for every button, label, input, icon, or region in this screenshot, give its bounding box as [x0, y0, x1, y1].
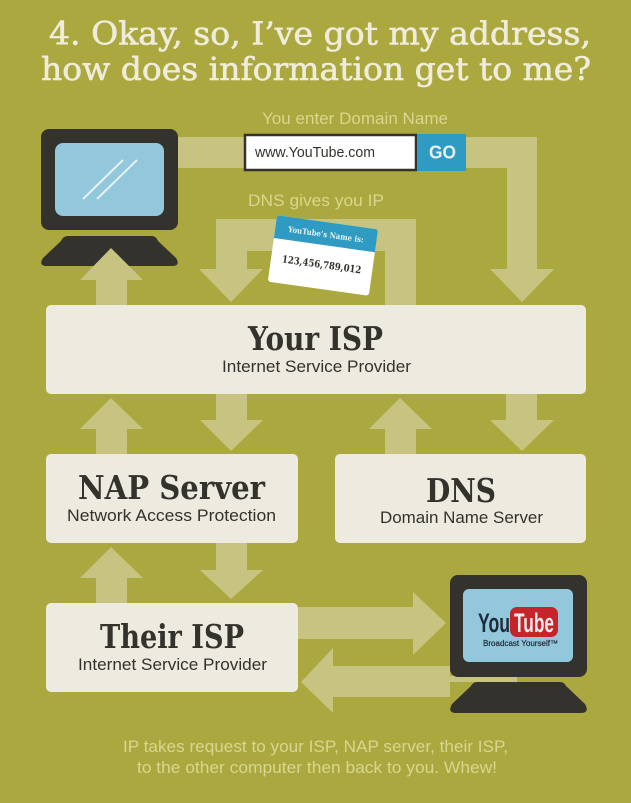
caption: summary	[123, 738, 508, 777]
search box	[245, 135, 416, 170]
panel: DNS: DNS	[426, 471, 496, 510]
arrow: NAP up to Your ISP	[80, 398, 143, 454]
arrow: other computer back to Their ISP	[301, 648, 517, 713]
arrow: DNS gives IP back	[199, 219, 416, 305]
arrow: Your ISP down to DNS	[490, 394, 554, 451]
computer: YouTube	[450, 575, 587, 713]
arrow: computer to search box	[178, 137, 246, 168]
GO button: GO	[429, 142, 456, 162]
arrow: Your ISP down to NAP	[200, 394, 263, 451]
caption: you enter domain name: You enter Domain Name	[262, 110, 448, 128]
panel: NAP Server	[46, 454, 298, 543]
caption: summary: IP takes request to your ISP, NAP server, their ISP,	[123, 738, 508, 756]
logo: YouTube: Broadcast Yourself™	[483, 639, 558, 648]
panel: NAP Server: Network Access Protection	[67, 507, 276, 525]
arrow: ISP up to computer	[80, 248, 143, 305]
arrow: Their ISP to other computer	[298, 592, 446, 655]
card: YouTube's name is: YouTube’s Name is:	[287, 224, 364, 244]
panel: DNS	[335, 454, 586, 543]
computer: user	[41, 129, 178, 266]
card: YouTube's name is: 123,456,789,012	[281, 254, 362, 276]
panel: Their ISP: Their ISP	[100, 617, 244, 656]
panel: Their ISP: Internet Service Provider	[78, 656, 268, 674]
arrow: GO to DNS	[466, 137, 554, 302]
panel: Their ISP	[46, 603, 298, 692]
title: 4. Okay, so, I’ve got my address,	[49, 14, 591, 52]
panel: Your ISP	[46, 305, 586, 394]
card: YouTube's name is	[268, 215, 378, 296]
panel: Your ISP: Your ISP	[247, 319, 383, 358]
logo: YouTube	[478, 607, 558, 648]
caption: summary: to the other computer then back to you. Whew!	[137, 759, 497, 777]
panel: DNS: Domain Name Server	[380, 509, 544, 527]
search box: www.YouTube.com	[254, 145, 375, 161]
caption: DNS gives you IP: DNS gives you IP	[248, 192, 384, 210]
logo: YouTube: You	[478, 608, 510, 638]
panel: Your ISP: Internet Service Provider	[222, 358, 412, 376]
title	[41, 14, 591, 88]
panel: NAP Server: NAP Server	[78, 468, 266, 507]
title: how does information get to me?	[41, 50, 591, 88]
arrow: NAP down to Their ISP	[200, 543, 263, 599]
GO button	[417, 134, 466, 171]
arrow: Their ISP up to NAP	[80, 547, 143, 603]
logo: YouTube: Tube	[514, 608, 554, 638]
arrow: DNS up to Your ISP	[369, 398, 432, 454]
